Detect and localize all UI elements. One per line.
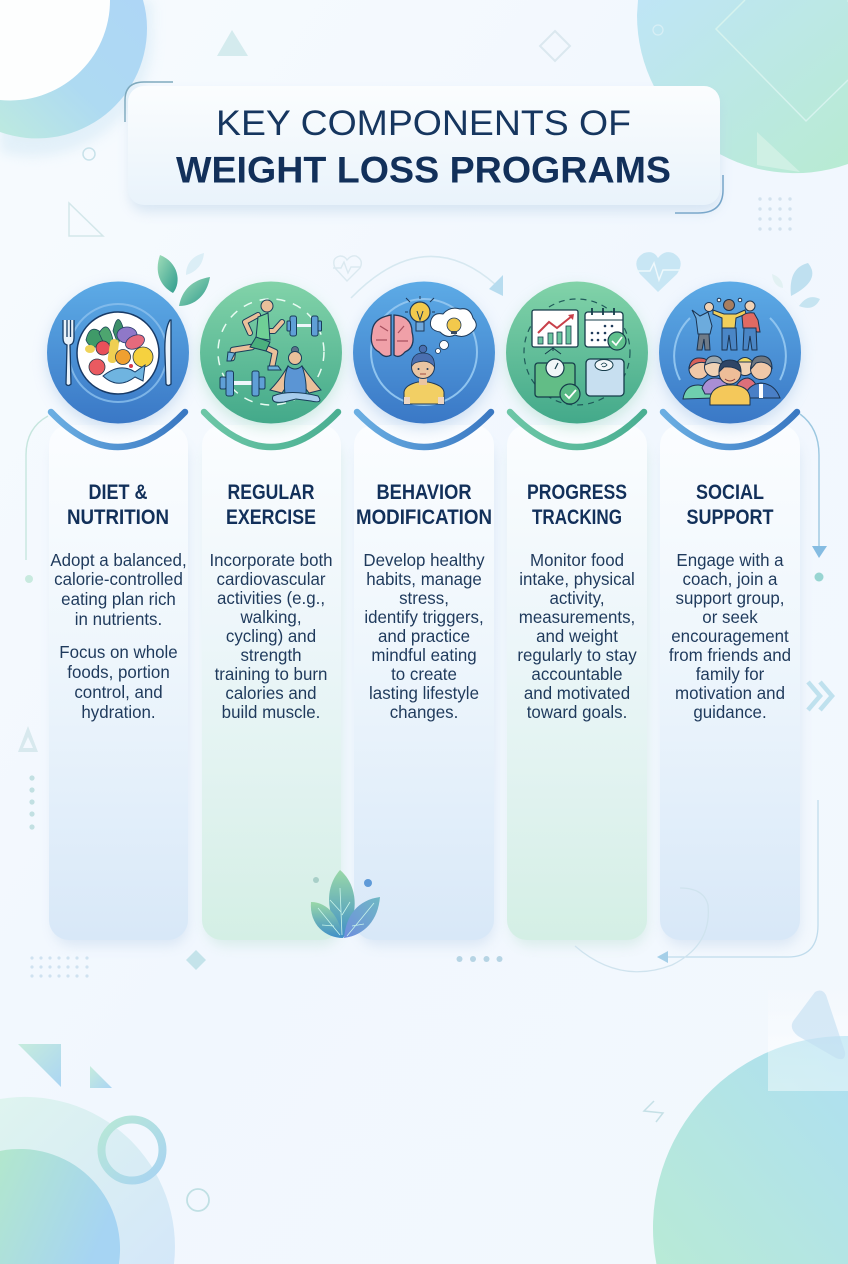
body: regular exercise <box>209 550 333 722</box>
yoga figure <box>270 346 321 402</box>
heading: social support <box>686 480 774 529</box>
fork <box>63 320 74 386</box>
body: regular exercise: cardiovascular <box>217 569 326 589</box>
runner <box>227 300 282 370</box>
body: behavior modification <box>363 550 485 722</box>
body: social support: from friends and <box>669 645 791 665</box>
right connector arrow <box>800 414 827 582</box>
body: behavior modification: changes. <box>390 702 458 722</box>
title text: KEY COMPONENTS OF <box>216 104 631 143</box>
body: regular exercise: training to burn <box>215 664 327 684</box>
body: diet and nutrition: hydration. <box>81 702 156 722</box>
arc under circle 4 <box>510 412 644 447</box>
heading: behavior modification <box>356 480 492 529</box>
heart outline decoration <box>333 256 361 281</box>
body: regular exercise: strength <box>240 645 302 665</box>
body: regular exercise: activities (e.g., <box>217 588 325 608</box>
body: diet and nutrition: eating plan rich <box>61 589 176 609</box>
leaves decoration above circle 1 <box>158 253 210 306</box>
dumbbell lower <box>220 371 265 396</box>
arc under circle 5 <box>663 412 797 447</box>
body: progress tracking: accountable <box>531 664 623 684</box>
body: social support: or seek <box>702 607 758 627</box>
body: social support: guidance. <box>693 702 767 722</box>
column 3 text: behavior modification <box>356 480 492 722</box>
body: social support: Engage with a <box>676 550 784 570</box>
decorative corner: top right circle <box>637 0 848 173</box>
body: behavior modification: mindful eating <box>371 645 477 665</box>
body: progress tracking: and motivated <box>524 683 630 703</box>
title panel <box>125 82 723 213</box>
body: regular exercise: walking, <box>239 607 302 627</box>
heading: social support: SOCIAL <box>696 480 764 504</box>
icon circle 3: behavior modification <box>353 282 495 429</box>
decorative corner: bottom left circles <box>0 1044 209 1264</box>
heading: diet and nutrition: NUTRITION <box>67 505 169 529</box>
heading: diet and nutrition <box>67 480 169 529</box>
icon circle 1: diet and nutrition <box>47 282 189 429</box>
brain <box>371 315 413 356</box>
body: regular exercise: cycling) and <box>226 626 316 646</box>
body: behavior modification: identify triggers, <box>364 607 484 627</box>
column 4 text: progress tracking <box>517 480 637 722</box>
body: behavior modification: lasting lifestyle <box>369 683 479 703</box>
body: social support: motivation and <box>675 683 785 703</box>
column card 4 <box>507 425 647 946</box>
heading: diet and nutrition: DIET & <box>88 480 148 504</box>
column card 1 <box>49 425 188 946</box>
person <box>404 345 444 404</box>
body: behavior modification: habits, manage <box>366 569 482 589</box>
body: social support <box>669 550 791 722</box>
body: diet and nutrition: control, and <box>74 682 163 702</box>
arc under circle 2 <box>204 412 338 447</box>
body: social support: family for <box>696 664 764 684</box>
body: social support: support group, <box>675 588 785 608</box>
body: behavior modification: to create <box>391 664 457 684</box>
body: regular exercise: calories and <box>225 683 317 703</box>
filled heart decoration <box>636 252 681 292</box>
body: progress tracking: activity, <box>549 588 605 608</box>
body: progress tracking: measurements, <box>519 607 635 627</box>
body: progress tracking: regularly to stay <box>517 645 637 665</box>
plate with food <box>69 304 167 402</box>
heading: progress tracking <box>527 480 627 529</box>
curved arrow over circle 3 <box>351 256 503 298</box>
icon circle 5: social support <box>659 282 801 429</box>
body: social support: encouragement <box>671 626 789 646</box>
bottom centre leaf icon <box>311 870 380 938</box>
bottom right loop arrow <box>575 800 818 972</box>
heading: regular exercise: REGULAR <box>228 480 315 504</box>
body: diet and nutrition: Focus on whole <box>59 642 178 662</box>
bathroom scale <box>586 359 624 396</box>
heading: regular exercise: EXERCISE <box>226 505 316 529</box>
body: progress tracking: toward goals. <box>527 702 627 722</box>
heading: progress tracking: PROGRESS <box>527 480 627 504</box>
body: regular exercise: build muscle. <box>222 702 320 722</box>
column 1 text: diet and nutrition <box>50 480 187 722</box>
column 2 text: regular exercise <box>209 480 333 722</box>
heading: behavior modification: BEHAVIOR <box>376 480 472 504</box>
icon circle 4: progress tracking <box>506 282 648 429</box>
heading: progress tracking: TRACKING <box>532 505 622 529</box>
arc under circle 1 <box>51 412 185 447</box>
thought bubble <box>430 308 476 354</box>
column card 5 <box>660 425 800 946</box>
knife <box>165 320 171 386</box>
body: behavior modification: Develop healthy <box>363 550 485 570</box>
body: diet and nutrition <box>50 550 187 722</box>
light bulb <box>405 296 435 331</box>
water drops decoration <box>772 263 820 308</box>
body: progress tracking: Monitor food <box>530 550 624 570</box>
three standing friends <box>692 298 760 350</box>
calendar <box>585 308 626 350</box>
column card 2 <box>202 425 341 946</box>
arc under circle 3 <box>357 412 491 447</box>
icon circle 2: regular exercise <box>200 282 342 429</box>
heading: behavior modification: MODIFICATION <box>356 505 492 529</box>
body: diet and nutrition: calorie-controlled <box>54 569 183 589</box>
body: diet and nutrition: foods, portion <box>67 662 170 682</box>
chevrons decoration <box>808 682 832 710</box>
body: regular exercise: Incorporate both <box>209 550 333 570</box>
body: diet and nutrition: Adopt a balanced, <box>50 550 187 570</box>
decorative small shapes <box>18 30 792 978</box>
decorative corner: top left ring <box>0 0 152 156</box>
body: social support: coach, join a <box>683 569 778 589</box>
heading: regular exercise <box>226 480 316 529</box>
title text: WEIGHT LOSS PROGRAMS <box>176 150 671 190</box>
decorative corner: bottom right circle <box>644 990 848 1264</box>
column 5 text: social support <box>669 480 791 722</box>
chart board <box>532 310 578 354</box>
body: diet and nutrition: in nutrients. <box>75 609 162 629</box>
column card 3 <box>354 425 494 946</box>
body: behavior modification: and practice <box>378 626 470 646</box>
group of people <box>683 356 780 405</box>
body: progress tracking: and weight <box>536 626 618 646</box>
dashed ring <box>218 299 324 405</box>
heading: social support: SUPPORT <box>686 505 774 529</box>
body: behavior modification: stress, <box>399 588 449 608</box>
body: progress tracking: intake, physical <box>519 569 635 589</box>
green scale <box>535 359 580 404</box>
body: progress tracking <box>517 550 637 722</box>
left connector line <box>25 416 48 583</box>
dumbbell upper <box>287 316 322 336</box>
title text <box>176 104 671 190</box>
